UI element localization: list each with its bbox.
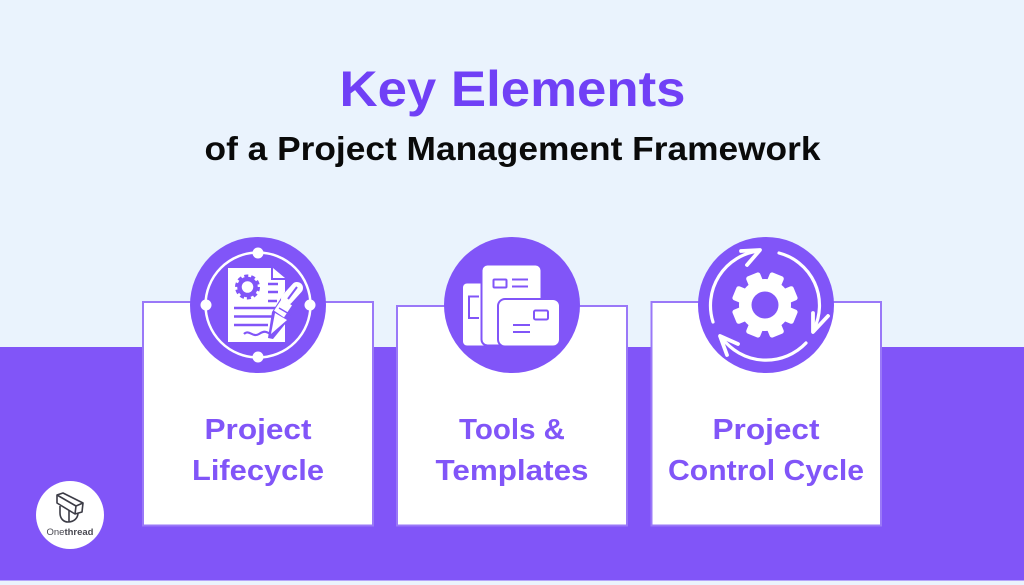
logo: Onethread: [36, 481, 104, 549]
label: project control cycle: Project: [712, 414, 820, 446]
title: Key Elements: [340, 61, 686, 117]
label: project lifecycle: Project: [204, 414, 312, 446]
icon: templates: [444, 237, 580, 373]
panel: project control cycle: [652, 237, 881, 526]
label: tools and templates: Tools &: [459, 414, 565, 446]
panel: project lifecycle: [143, 237, 373, 526]
icon: gear with cycle arrows: [698, 237, 834, 373]
label: project lifecycle: Lifecycle: [192, 455, 324, 487]
icon: document with pen: [190, 237, 326, 373]
icon: logo mark: [57, 493, 83, 522]
label: tools and templates: Templates: [436, 455, 588, 487]
label: project control cycle: Control Cycle: [668, 455, 864, 487]
subtitle: of a Project Management Framework: [204, 130, 821, 167]
panel: tools and templates: [397, 237, 627, 526]
brand name: Onethread: [46, 527, 94, 538]
